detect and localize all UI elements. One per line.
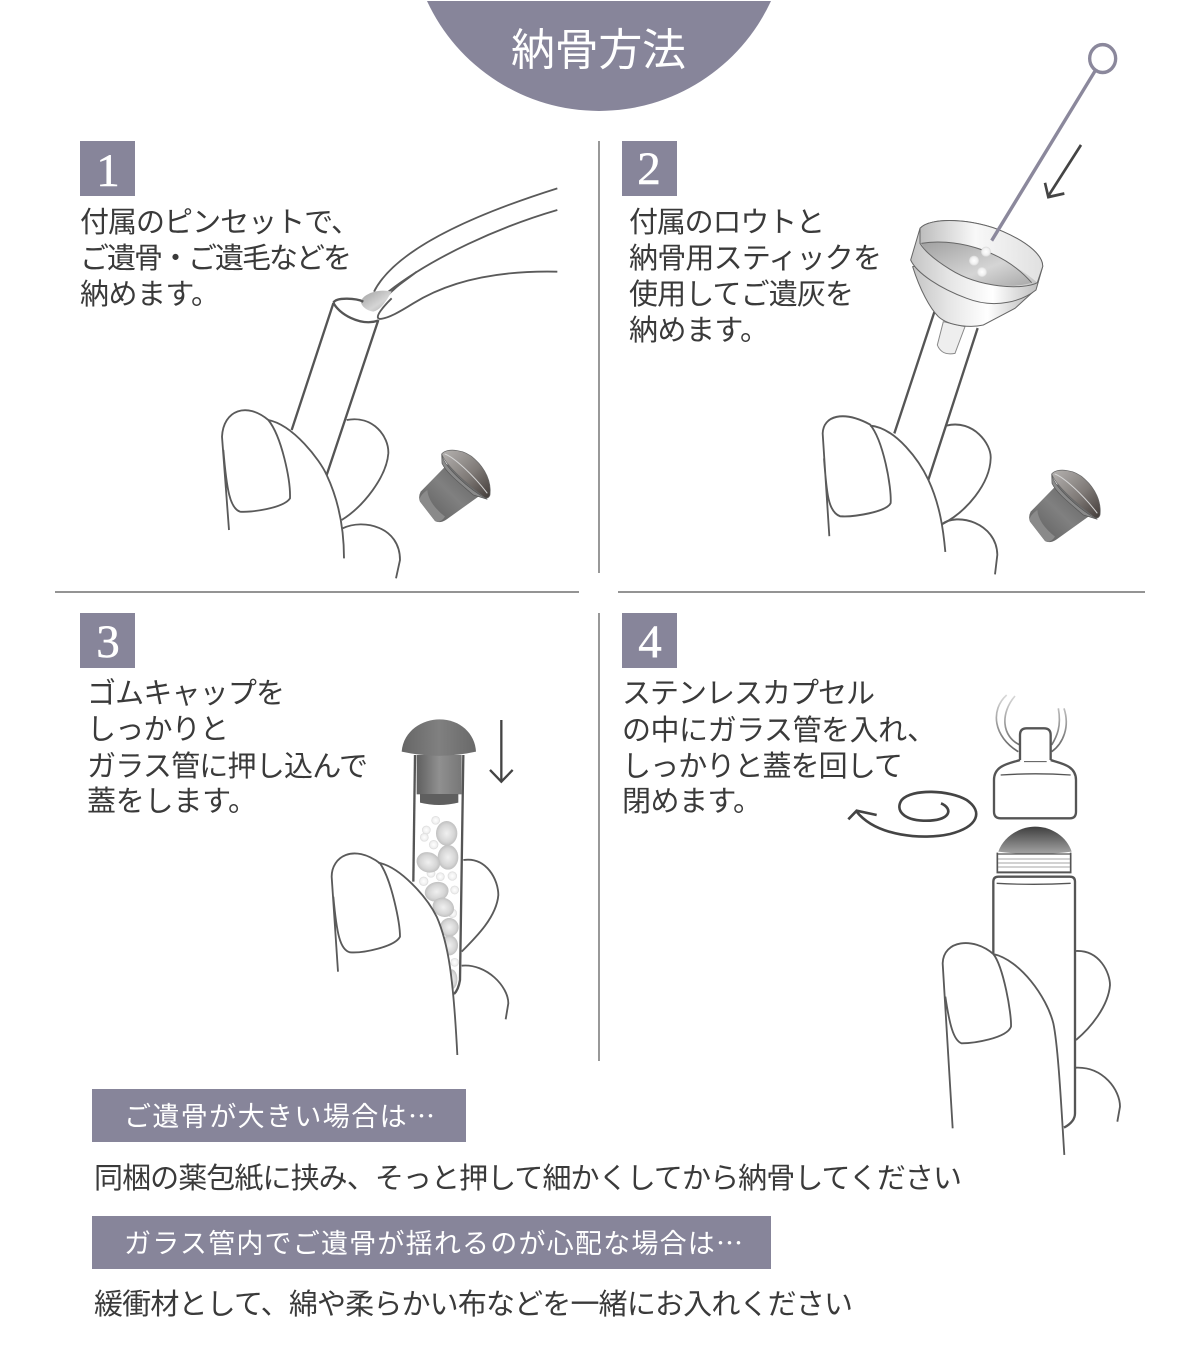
- glass tube: [292, 299, 378, 475]
- note 1 heading bar: [92, 1089, 466, 1142]
- tube contents: bone pieces: [414, 816, 459, 989]
- note 1 text: 同梱の薬包紙に挟み、そっと押して細かくしてから納骨してください: [94, 1162, 962, 1195]
- rubber cap: [1029, 470, 1100, 542]
- step 2 text: 付属のロウトと: [629, 206, 825, 239]
- glass tube: [894, 312, 978, 480]
- step 4 text: しっかりと蓋を回して: [622, 750, 903, 783]
- rotation arrow: [848, 792, 976, 837]
- step 2 illustration: funnel, stick and tube in hand: [823, 45, 1116, 574]
- rubber cap: [402, 719, 476, 805]
- hand outline: [943, 943, 1120, 1155]
- stick: [992, 45, 1116, 241]
- note 2 heading bar: ガラス管内でご遺骨が揺れるのが心配な場合は…: [124, 1222, 743, 1261]
- note 2 heading bar: [92, 1216, 771, 1269]
- funnel: [911, 221, 1043, 354]
- divider: horizontal right: [618, 591, 1145, 593]
- step 3 number badge: 3: [96, 616, 120, 668]
- panel: step 1: [80, 141, 557, 578]
- step 1 text: 納めます。: [80, 278, 220, 311]
- hand outline: [823, 416, 997, 574]
- capsule body: [993, 877, 1075, 1128]
- step 3 text: ゴムキャップを: [87, 677, 285, 710]
- vibration rings: [996, 695, 1066, 752]
- note 1 heading bar: ご遺骨が大きい場合は…: [124, 1095, 435, 1134]
- step 2 text: 使用してご遺灰を: [629, 278, 854, 311]
- ash grains: [969, 247, 991, 277]
- step 3 text: ガラス管に押し込んで: [87, 750, 368, 783]
- step 3 text: 蓋をします。: [87, 785, 257, 818]
- step 4 text: [622, 678, 936, 818]
- step 1 text: ご遺骨・ご遺毛などを: [80, 242, 352, 275]
- step 3 text: しっかりと: [87, 714, 229, 746]
- step 2 text: 納骨用スティックを: [629, 242, 882, 275]
- hand outline: [332, 853, 508, 1055]
- step 3 text: [87, 677, 368, 818]
- capsule lid: [994, 728, 1076, 818]
- step 1 number badge: 1: [96, 145, 120, 197]
- panel: step 3: [80, 613, 513, 1055]
- panel: step 4: [622, 613, 1120, 1155]
- step 1 text: 付属のピンセットで、: [80, 206, 360, 239]
- capsule thread: [997, 853, 1071, 873]
- step 1 number badge: [80, 141, 135, 197]
- hand outline: [222, 410, 400, 578]
- note 2 text: 緩衝材として、綿や柔らかい布などを一緒にお入れください: [94, 1288, 853, 1321]
- step 1 illustration: tweezers and glass tube in hand: [222, 188, 557, 578]
- divider: vertical bottom: [598, 613, 600, 1061]
- arrow: [490, 720, 513, 782]
- step 4 text: の中にガラス管を入れ、: [622, 714, 936, 747]
- bone fragment: [361, 291, 392, 312]
- step 4 text: ステンレスカプセル: [622, 678, 875, 710]
- step 4 text: 閉めます。: [622, 786, 762, 818]
- capsule dome: [998, 827, 1072, 854]
- step 3 number badge: [80, 613, 135, 668]
- step 3 illustration: capped tube in hand: [332, 719, 513, 1055]
- divider: vertical top: [598, 141, 600, 573]
- header: semicircle title: [427, 1, 771, 111]
- divider: horizontal left: [55, 591, 579, 593]
- step 2 text: [629, 206, 882, 347]
- title: 納骨方法: [511, 26, 686, 75]
- step 2 text: 納めます。: [629, 314, 769, 347]
- step 4 number badge: 4: [638, 616, 662, 668]
- tweezers: [374, 188, 557, 319]
- panel: step 2: [622, 45, 1116, 574]
- step 4 number badge: [622, 613, 677, 668]
- step 4 illustration: capsule and lid in hand: [848, 695, 1120, 1155]
- step 2 number badge: [622, 141, 677, 196]
- glass tube: [413, 755, 463, 994]
- arrow: [1045, 145, 1081, 197]
- rubber cap: [419, 450, 490, 522]
- step 2 number badge: 2: [637, 143, 661, 195]
- step 1 text: [80, 206, 360, 311]
